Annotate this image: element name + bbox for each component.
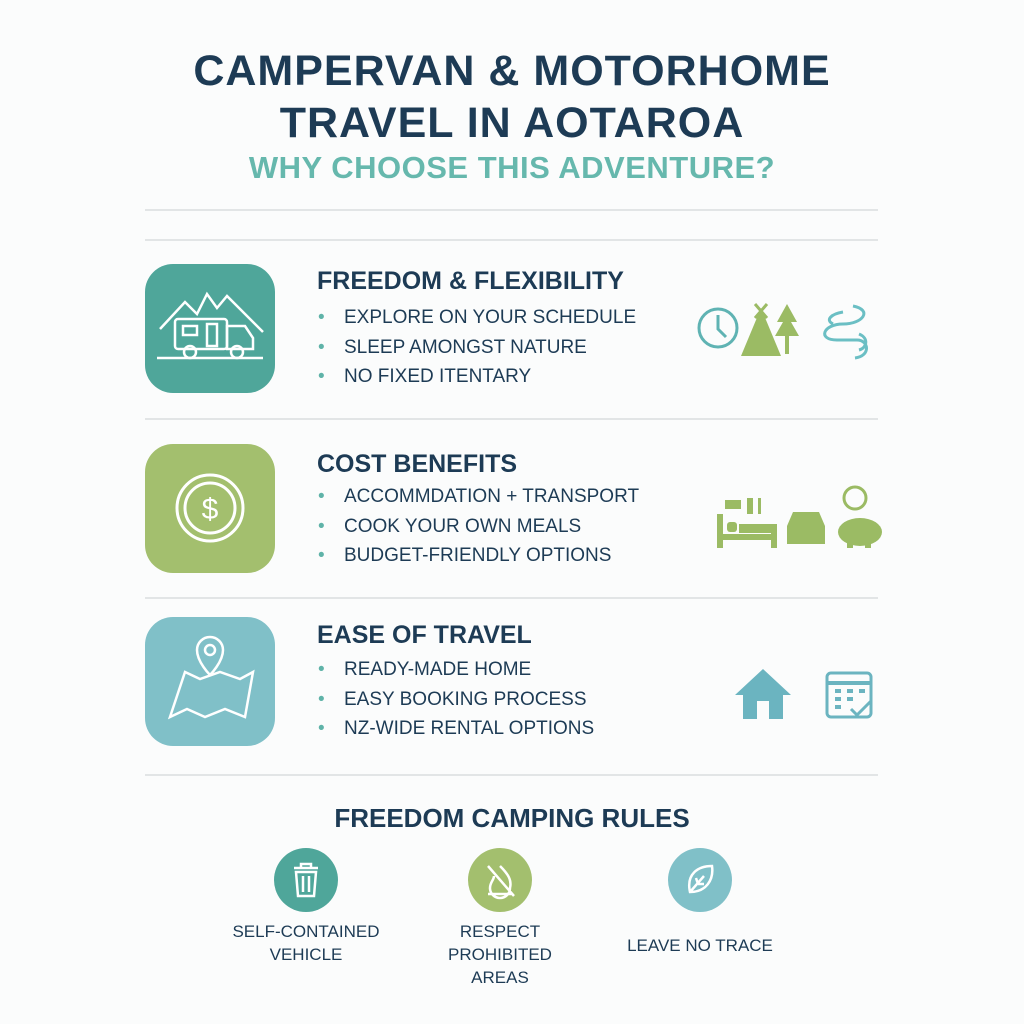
icon: campervan: [145, 264, 275, 393]
rule: prohibited: RESPECT: [460, 922, 540, 941]
bullets: NZ-WIDE RENTAL OPTIONS: [344, 718, 594, 739]
rule: self-contained: VEHICLE: [270, 945, 342, 964]
icons: house calendar: [735, 669, 872, 719]
icon: dollar: $: [202, 493, 219, 526]
title: TRAVEL IN AOTAROA: [280, 99, 744, 147]
heading: COST BENEFITS: [317, 450, 517, 478]
icon: bin: [274, 848, 338, 912]
subtitle: WHY CHOOSE THIS ADVENTURE?: [249, 150, 775, 185]
bullets: ACCOMMDATION + TRANSPORT: [344, 486, 639, 507]
icon: map: [145, 617, 275, 746]
icon: no fire: [468, 848, 532, 912]
bullets: READY-MADE HOME: [344, 659, 531, 680]
rule: self-contained: SELF-CONTAINED: [232, 922, 380, 941]
bullets: BUDGET-FRIENDLY OPTIONS: [344, 545, 611, 566]
bullets: [318, 659, 594, 739]
bullets: EASY BOOKING PROCESS: [344, 688, 587, 710]
rule: leave no trace: [627, 848, 773, 955]
title: CAMPERVAN & MOTORHOME: [193, 47, 831, 95]
bullets: COOK YOUR OWN MEALS: [344, 516, 581, 536]
panel: cost: [145, 444, 882, 573]
rule: leave no trace: LEAVE NO TRACE: [627, 936, 773, 955]
rule: self-contained: [232, 848, 380, 964]
icon: leaf: [668, 848, 732, 912]
bullets: SLEEP AMONGST NATURE: [344, 336, 587, 358]
icon: dollar: [145, 444, 275, 573]
panel: freedom: [145, 264, 868, 393]
title: [193, 47, 831, 147]
rule: prohibited: [448, 848, 552, 987]
bullets: [318, 307, 636, 387]
bullets: [318, 486, 639, 566]
bullets: NO FIXED ITENTARY: [344, 366, 531, 387]
heading: FREEDOM & FLEXIBILITY: [317, 267, 624, 295]
heading: rules: FREEDOM CAMPING RULES: [334, 803, 690, 833]
rule: prohibited: AREAS: [471, 968, 529, 987]
rule: prohibited: PROHIBITED: [448, 945, 552, 964]
heading: EASE OF TRAVEL: [317, 621, 532, 649]
bullets: EXPLORE ON YOUR SCHEDULE: [344, 307, 636, 328]
panel: ease: [145, 617, 872, 746]
icons: clock tent wind: [698, 303, 868, 360]
icons: bed car piggy: [717, 486, 882, 548]
